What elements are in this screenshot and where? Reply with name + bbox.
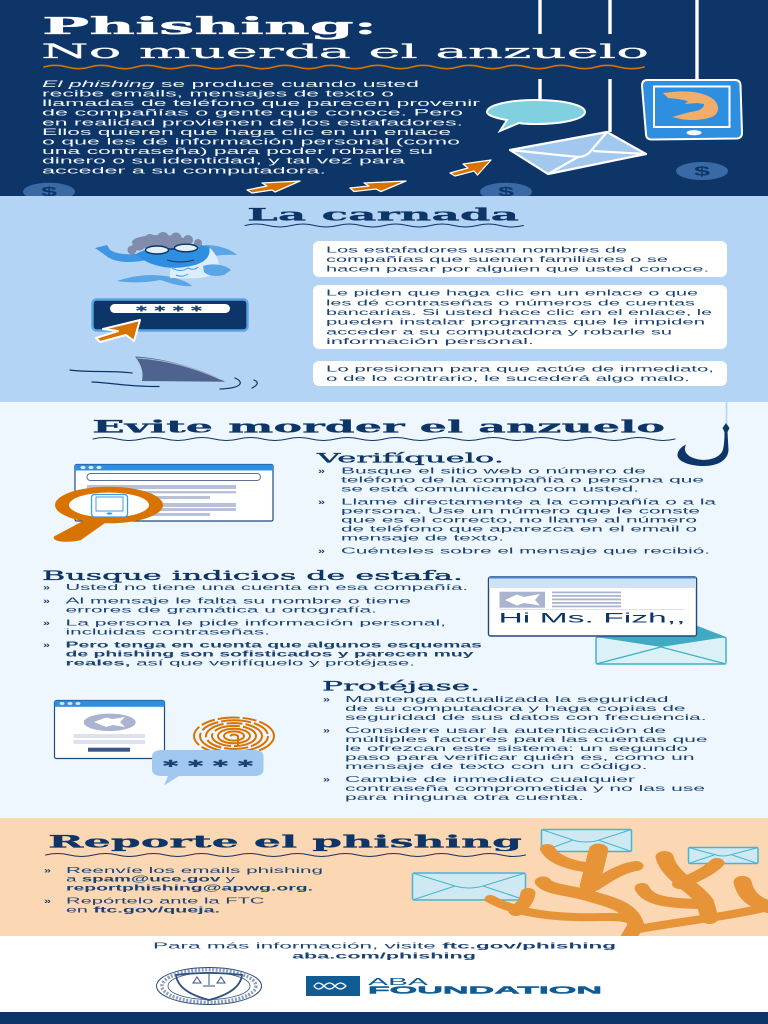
card 1: compañías que suenan familiares o se [326,254,669,264]
panel: La carnada [0,196,768,402]
card 2: acceder a su computadora y robarle su [326,326,673,336]
text: report list: a spam@uce.gov y [66,874,237,884]
intro text: llamadas de teléfono que parecen provenir [42,98,480,108]
card 1: hacen pasar por alguien que usted conoce. [326,264,709,274]
card 2: Le piden que haga clic en un enlace o que [326,288,699,298]
card 3: o de lo contrario, le sucederá algo malo. [326,373,690,383]
text: Verifíquelo: » [318,465,325,475]
wave underline [245,224,523,227]
icon: password box with cursor: ✱ ✱ ✱ ✱ [135,304,204,314]
left fin arm [95,245,146,262]
text: report list: » [44,865,51,875]
text: report list: reportphishing@apwg.org. [66,883,313,893]
text: Busque indicios: errores de gramática u ortografía. [66,605,377,615]
card 2: información personal. [326,336,534,346]
text: Protéjase: Cambie de inmediato cualquier [345,774,635,784]
password bubble [152,750,264,786]
phone in magnifier [92,494,128,517]
text: Busque indicios: » [43,582,50,592]
icon: envelope [510,132,646,174]
text: Protéjase: seguridad de sus datos con frecuencia. [345,712,706,722]
heading: La carnada: La carnada [247,206,520,225]
text: report list: » [44,896,51,906]
belly scales [172,267,198,276]
card 3 [313,361,727,386]
text: Busque indicios: La persona le pide información personal, [66,618,446,628]
text: report list [44,865,324,915]
intro text: en realidad provienen de los estafadores. [42,117,463,127]
icon: browser with magnifier [54,464,273,542]
text: Verifíquelo: » [318,497,325,507]
wave underline [46,854,526,856]
icon: email window with envelope [488,577,726,664]
text: Verifíquelo: Llame directamente a la compañía o a la [341,497,717,507]
text: Verifíquelo: Cuénteles sobre el mensaje que recibió. [341,545,710,555]
card 2: les dé contraseñas o números de cuentas [326,297,695,307]
logo: ABA Foundation: FOUNDATION [368,984,602,996]
footer bar [0,1012,768,1024]
text: Busque indicios: Usted no tiene una cuenta en esa compañía. [66,582,468,592]
icon: login window, fingerprint, password bubble [54,700,274,786]
text: Busque indicios [42,569,483,668]
icon: dollar coins: $ [41,184,59,199]
text: Verifíquelo: » [318,545,325,555]
icon: fishing hook [677,402,730,466]
icon: cursor arrows [247,160,491,193]
icon: password box with cursor [92,300,248,342]
fingerprint [194,718,274,754]
text: Protéjase: de su computadora y haga copias de [345,703,686,713]
magnifier [54,521,105,542]
text: Protéjase: para ninguna otra cuenta. [345,792,584,802]
title: No muerda el anzuelo [41,39,649,63]
icon: email window with envelope: Hi Ms. Fizh,, [498,611,686,626]
card 3: Lo presionan para que actúe de inmediato, [326,363,714,373]
right arm [203,264,231,276]
text: more information: Para más información, visite ftc.gov/phishing [153,940,616,950]
icon: dollar coins: $ [694,164,712,178]
hair [128,232,202,254]
panel: Reporte el phishing [0,818,768,945]
text: Busque indicios: reales, así que verifíquelo y protéjase. [66,658,415,668]
card 1 [313,241,727,277]
right fin [203,245,237,258]
wave underline [93,438,675,440]
card 2: pueden instalar programas que le impiden [326,317,706,327]
logo: ABA Foundation: ABA [368,976,428,988]
text: Busque indicios: » [43,640,50,650]
icon: shark fin [70,356,257,389]
text: report list: Reenvíe los emails phishing [66,865,324,875]
icon: hanging lines [540,0,697,132]
logo: FTC seal [156,968,262,1004]
text: Protéjase: le ofrezcan este sistema: un segundo [345,743,689,753]
fish silhouette [505,594,540,606]
card 2: bancarias. Si usted hace clic en el enlace, le [326,307,713,317]
text: Busque indicios: Busque indicios de estafa. [42,569,463,584]
icon: shrimp [663,91,718,120]
smile [167,260,194,262]
text: Protéjase: mensaje de texto con un código. [345,761,648,771]
intro text: recibe emails, mensajes de texto o [42,88,394,98]
logo: ABA Foundation [306,976,602,996]
intro text: acceder a su computadora. [42,165,326,175]
panel: footer [0,936,768,1012]
cursor [96,320,140,342]
lower tail fin [117,275,192,286]
intro text: de compañías o gente que conoce. Pero [42,108,463,118]
title wave underline [44,65,644,69]
text: Verifíquelo: se está comunicando con usted. [341,483,639,493]
head [136,244,210,268]
panel: Evite morder el anzuelo [0,402,768,818]
card 2 [313,285,727,349]
icon: dollar coins: $ [498,184,516,199]
icon: coral [490,849,768,945]
text: Busque indicios: Al mensaje le falta su nombre o tiene [66,596,412,606]
heading: Evite morder: Evite morder el anzuelo [92,418,665,437]
text: Protéjase: Mantenga actualizada la seguridad [345,694,669,704]
body [170,248,219,278]
text: Protéjase [322,680,708,802]
text: Protéjase: Considere usar la autenticación de [345,725,667,735]
icon: login window, fingerprint, password bubble: ✱ ✱ ✱ ✱ [162,759,254,770]
icon: phone with shrimp [642,80,742,140]
text: Verifíquelo: Verifíquelo. [315,452,504,467]
intro text: una contraseña) para poder robarle su [42,146,433,156]
text: Protéjase: múltiples factores para las cuentas que [345,734,708,744]
text: Protéjase: » [323,725,330,735]
text: Busque indicios: incluidas contraseñas. [66,627,270,637]
icon: dollar coins [23,162,728,201]
intro text: El phishing se produce cuando usted [42,79,419,89]
text: Busque indicios: » [43,596,50,606]
panel: header [0,0,768,201]
text: Verifíquelo: que es el correcto, no llame al número [341,515,698,525]
text: Protéjase: Protéjase. [322,680,480,695]
intro text: Ellos quieren que haga clic en un enlace [42,127,451,137]
intro text: o que les dé información personal (como [42,136,460,146]
envelope [596,625,726,664]
card 1: Los estafadores usan nombres de [326,244,628,254]
text: more information [153,940,616,960]
icon: envelopes [412,830,758,900]
text: Protéjase: paso para verificar quién es, como un [345,752,695,762]
text: Verifíquelo: teléfono de la compañía o persona que [341,474,705,484]
title [41,12,649,63]
text: Protéjase: » [323,774,330,784]
text: Verifíquelo: Busque el sitio web o número de [341,465,647,475]
text: Verifíquelo: mensaje de texto. [341,532,504,542]
intro text: dinero o su identidad, y tal vez para [42,156,405,166]
text: Verifíquelo [315,452,717,555]
text: Busque indicios: de phishing son sofisticados y parecen muy [66,649,474,659]
text: Verifíquelo: de teléfono que aparezca en el email o [341,524,698,534]
heading: Reporte: Reporte el phishing [48,833,523,852]
text: Protéjase: » [323,694,330,704]
text: report list: Repórtelo ante la FTC [66,896,264,906]
text: more information: aba.com/phishing [292,950,476,960]
text: Busque indicios: Pero tenga en cuenta que algunos esquemas [66,640,483,650]
icon: fish with glasses [95,232,237,286]
glasses [146,244,198,254]
intro text [42,79,480,175]
text: report list: en ftc.gov/queja. [66,905,220,915]
icon: speech bubble [487,100,585,131]
title: Phishing: [42,12,377,40]
text: Busque indicios: » [43,618,50,628]
text: Protéjase: contraseña comprometida y no las use [345,783,706,793]
text: Verifíquelo: persona. Use un número que le conste [341,506,701,516]
